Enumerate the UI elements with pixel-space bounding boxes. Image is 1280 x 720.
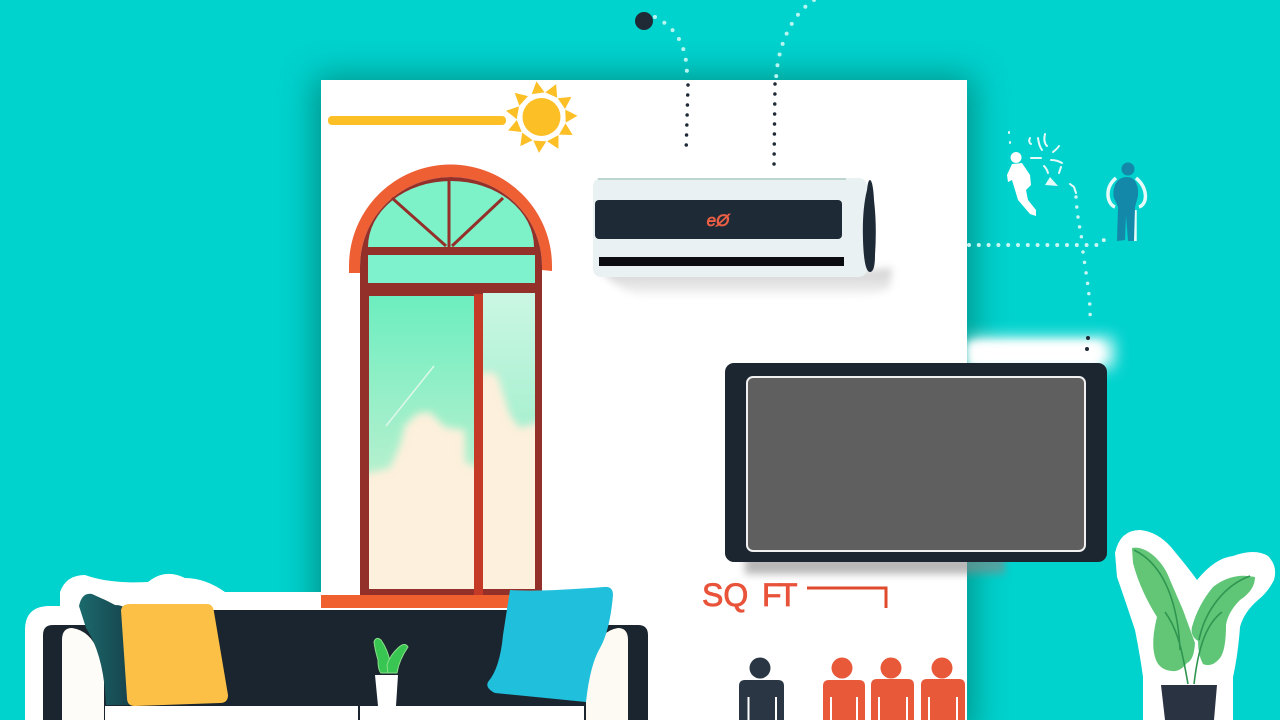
arch muscles	[392, 180, 503, 247]
people row	[739, 658, 965, 720]
person body	[1113, 177, 1138, 241]
left curve	[655, 17, 687, 76]
icon: blue person	[1108, 162, 1145, 241]
yellow pillow	[121, 604, 228, 706]
plant halo	[1115, 530, 1275, 720]
glow dots	[1085, 336, 1090, 351]
SQ FT text: F	[762, 577, 782, 613]
dark person	[739, 658, 784, 720]
icon: scattered particles	[1009, 132, 1076, 193]
sofa halo	[25, 574, 321, 720]
icon: sofa	[25, 574, 648, 720]
icon: white person	[1007, 152, 1036, 216]
orange person 1	[823, 658, 865, 720]
halo overlap	[92, 583, 205, 606]
arch glass	[368, 181, 534, 247]
right leaf	[1192, 576, 1255, 665]
pane glint	[386, 366, 434, 426]
right pane sky	[483, 293, 535, 432]
TV screen	[747, 377, 1085, 551]
plant pot	[1161, 685, 1217, 720]
SQ FT text: T	[778, 577, 798, 613]
seat right	[360, 706, 584, 720]
SQ FT text: SQ	[702, 577, 748, 613]
AC vent	[599, 257, 844, 266]
television shadow	[745, 556, 1005, 574]
upper vertical	[1076, 197, 1083, 245]
left pane sky	[369, 296, 474, 478]
right curve	[776, 0, 814, 80]
horizontal line	[969, 236, 1107, 245]
sun beam	[328, 116, 506, 125]
right glass pane	[483, 293, 535, 589]
label: SQ FT	[702, 577, 886, 613]
small plant leaves	[374, 638, 408, 673]
AC body	[593, 178, 867, 277]
window sill	[321, 595, 521, 608]
AC top edge	[598, 178, 846, 180]
window arch trim	[349, 164, 552, 273]
seat left	[105, 706, 358, 720]
window frame	[360, 177, 542, 595]
dotted connectors: ceiling	[635, 0, 814, 167]
AC logo: eØ	[707, 211, 731, 230]
dotted connectors: people	[969, 197, 1107, 324]
icon: sun with beam	[328, 80, 578, 153]
left glass pane	[369, 296, 474, 589]
person halo	[1108, 178, 1145, 241]
person head	[1122, 162, 1134, 176]
orange person 3	[921, 658, 965, 720]
small plant pot	[375, 675, 398, 706]
screen glow	[968, 338, 1113, 368]
right arm	[586, 628, 628, 720]
left arm	[62, 628, 104, 720]
middle glass	[368, 255, 535, 283]
glow core	[968, 342, 1100, 366]
panel: white room wall	[321, 80, 967, 720]
sun rays	[505, 80, 578, 153]
orange person 2	[871, 658, 914, 720]
left leaf	[1132, 548, 1195, 671]
AC end cap	[863, 180, 876, 272]
right drop	[774, 84, 775, 167]
blue pillow	[487, 587, 613, 702]
panel shadow	[314, 76, 974, 720]
sun disc	[522, 98, 560, 136]
plant stems	[1134, 550, 1250, 684]
sofa frame	[43, 610, 648, 720]
icon: television	[725, 363, 1107, 562]
teal pillow	[79, 594, 135, 705]
icon: potted plant	[1115, 530, 1275, 720]
air conditioner shadow	[600, 268, 892, 294]
lower vertical	[1083, 252, 1090, 324]
icon: arched window	[321, 164, 552, 608]
left drop	[686, 85, 688, 154]
AC display panel	[595, 200, 842, 239]
window mullion	[474, 294, 483, 595]
measure bracket	[807, 588, 886, 608]
TV bezel	[725, 363, 1107, 562]
node dot	[635, 12, 653, 30]
icon: air conditioner	[593, 178, 876, 277]
